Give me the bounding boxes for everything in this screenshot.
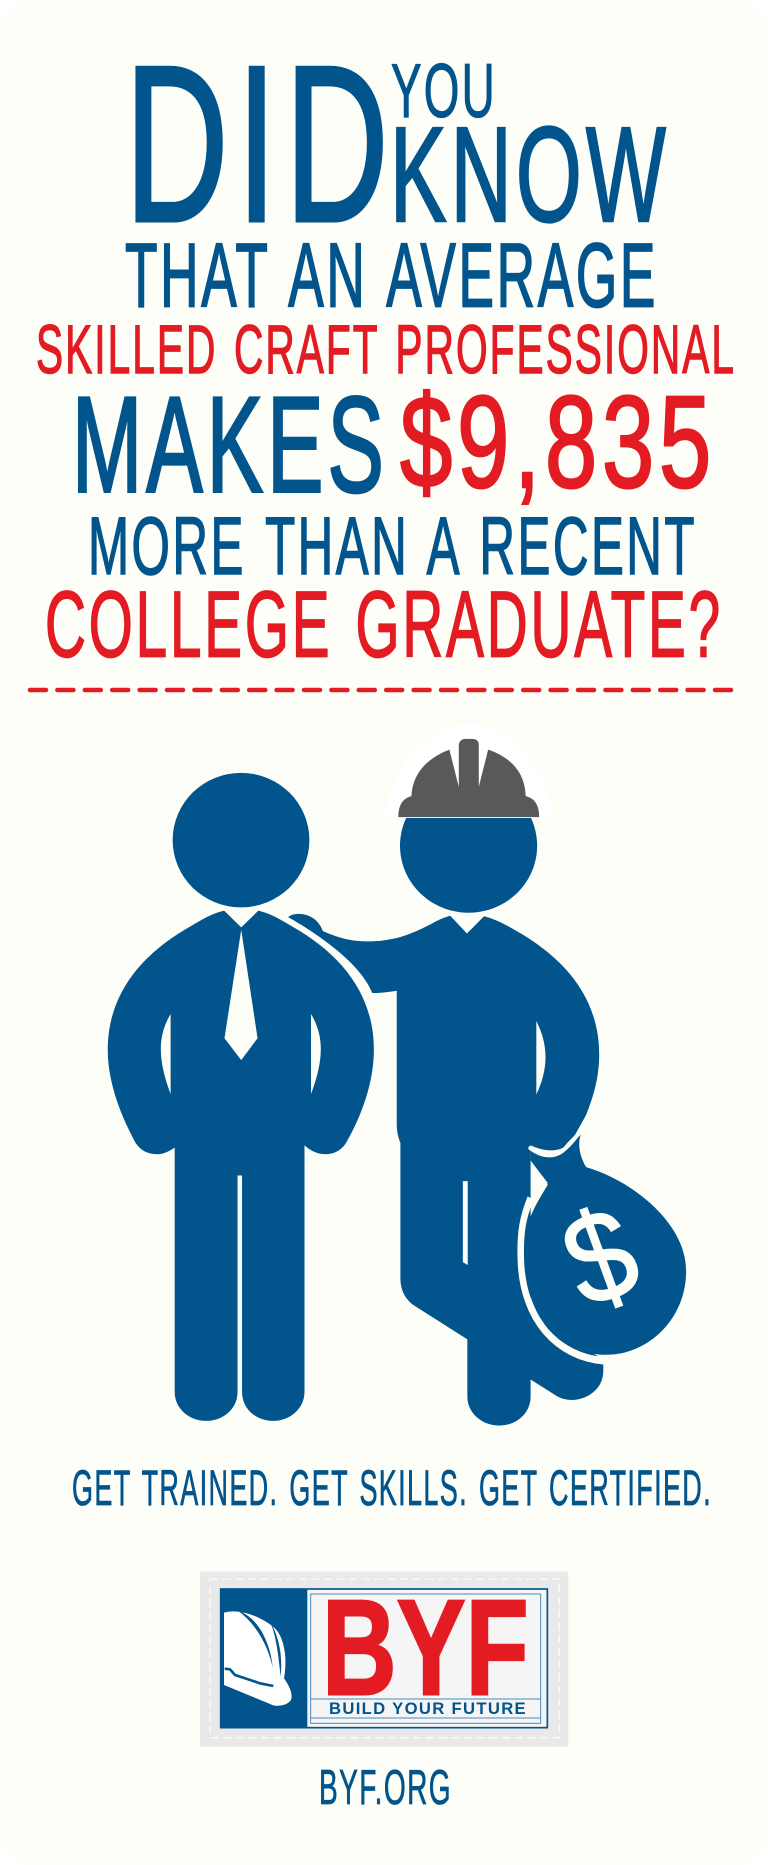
logo letters BYF: BYF [322,1571,529,1723]
bag rope [530,1130,582,1155]
bag gap [531,1161,548,1198]
heading word: YOU: YOU [391,49,497,134]
figure: skilled craft professional [288,724,686,1426]
icon: necktie [224,930,258,1060]
helmet dome [224,1611,292,1706]
icon: hard hat [398,739,539,817]
icon: money bag [525,1131,686,1355]
logo: build your future [200,1571,568,1747]
website address: BYF.ORG [319,1761,452,1815]
logo panel [221,1589,547,1728]
heading: did you know [125,20,670,268]
figure: college graduate [108,773,374,1421]
helmet halo [384,724,553,818]
head: professional [400,818,537,913]
logo subtitle: BUILD YOUR FUTURE [329,1699,526,1718]
head: graduate [173,773,309,907]
logo patch background [200,1572,568,1747]
money bag outline [521,1198,604,1361]
heading word: DID: DID [125,20,397,268]
body: professional [288,914,603,1426]
icon: logo hard hat [224,1611,292,1706]
body: graduate suit [108,911,374,1421]
logo blue block [221,1589,307,1728]
text line: makes: MAKES [72,368,388,520]
icon: dollar sign: $ [545,1180,656,1336]
illustration: two workers [108,724,686,1426]
helmet band [225,1669,273,1686]
helmet stripes [238,1611,281,1677]
